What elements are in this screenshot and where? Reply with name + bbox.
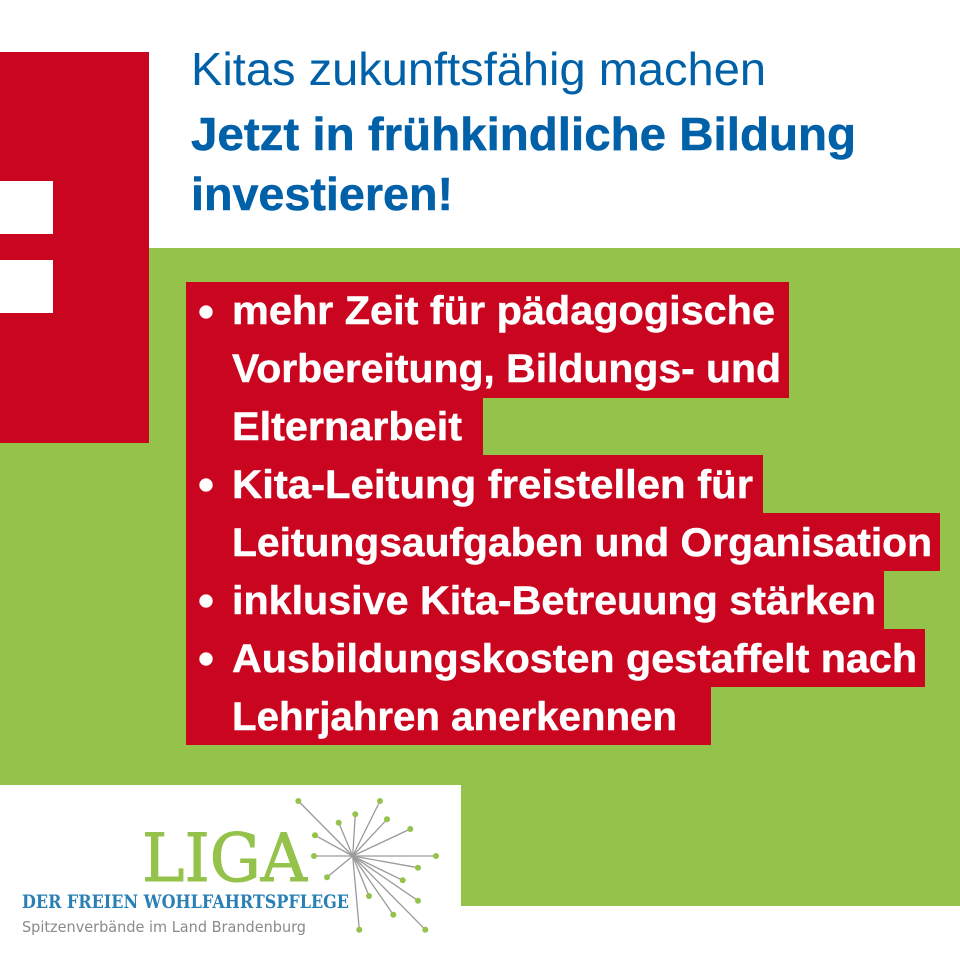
title: investieren! <box>191 168 453 220</box>
bullet: Ausbildungskosten <box>200 637 917 739</box>
icon: starburst <box>295 798 439 933</box>
bullet: Ausbildungskosten: Lehrjahren anerkennen <box>232 695 677 739</box>
logo subtitle: DER FREIEN WOHLFAHRTSPFLEGE <box>22 891 349 913</box>
title: Kitas zukunftsfähig machen <box>191 43 766 95</box>
bullet: Vorbereitung: mehr Zeit für pädagogische <box>232 289 775 333</box>
title <box>191 43 856 220</box>
bullet: Vorbereitung <box>200 289 781 449</box>
bullet: inklusive Betreuung: inklusive Kita-Betreuung stärken <box>232 579 876 623</box>
logo tagline: Spitzenverbände im Land Brandenburg <box>22 918 306 936</box>
title: Jetzt in frühkindliche Bildung <box>191 108 856 160</box>
bullet: Ausbildungskosten: Ausbildungskosten gestaffelt nach <box>232 637 917 681</box>
bullet: Vorbereitung: Vorbereitung, Bildungs- und <box>232 347 781 391</box>
logo wordmark: LIGA <box>142 820 308 897</box>
panel: green background <box>0 248 960 906</box>
panel: red bullet list <box>186 282 940 745</box>
logo: LIGA <box>22 798 439 936</box>
bullet: Kita-Leitung <box>200 463 932 565</box>
bullet: Vorbereitung: Elternarbeit <box>232 405 462 449</box>
bullet: Kita-Leitung: Leitungsaufgaben und Organisation <box>232 521 932 565</box>
icon: red block with white bars <box>0 52 149 443</box>
bullet: Kita-Leitung: Kita-Leitung freistellen für <box>232 463 753 507</box>
red highlight background <box>186 282 940 745</box>
